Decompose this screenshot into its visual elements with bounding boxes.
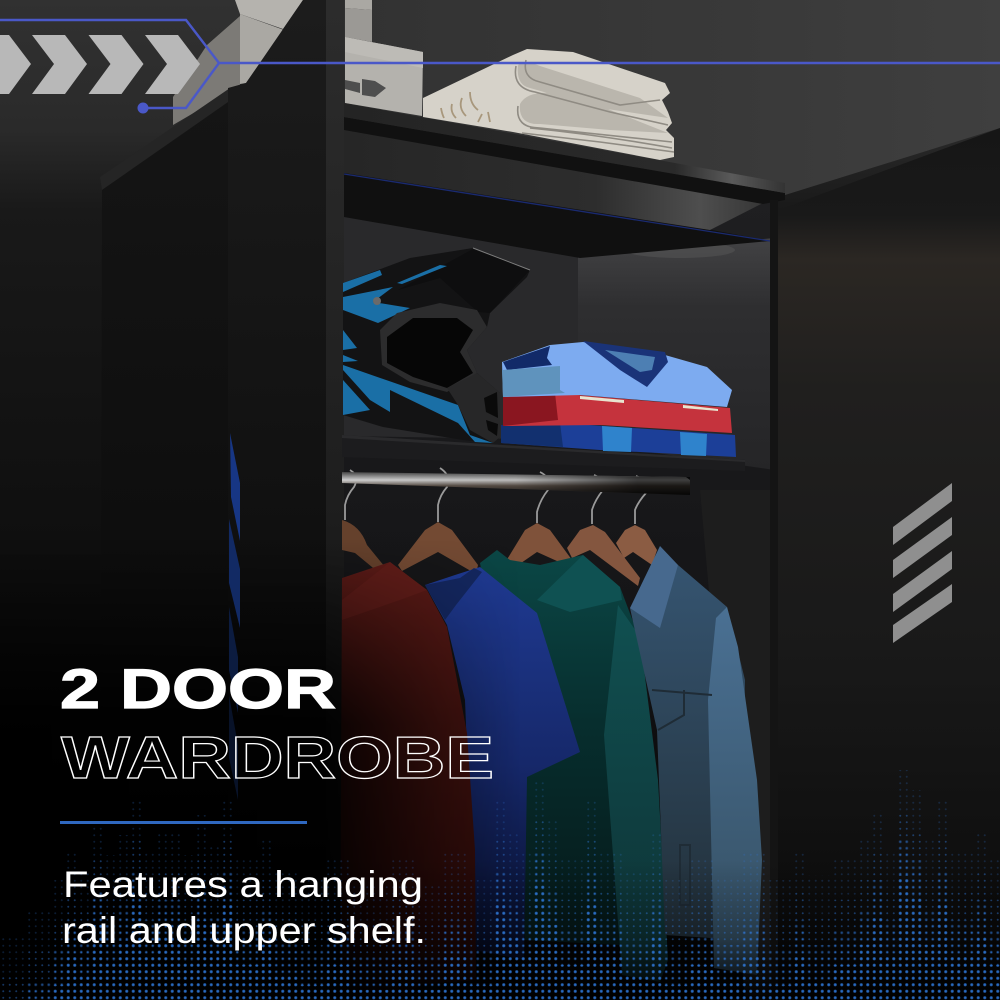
helmet face opening: [387, 318, 473, 388]
title line: 2 DOOR: 2 DOOR: [60, 657, 336, 720]
left dark overlay: [0, 562, 502, 978]
storage boxes on top of wardrobe: [173, 0, 423, 125]
icon: door vents: [893, 483, 952, 643]
wardrobe interior: [344, 103, 785, 1000]
upper right wall: [345, 0, 1000, 195]
helmet chin guard: [447, 373, 500, 443]
hanging rail: [342, 472, 690, 495]
helmet: [343, 248, 530, 443]
garments: [340, 546, 762, 1000]
garment: green hoodie: [480, 550, 668, 982]
circuit end dot: [138, 102, 148, 114]
shirt: middle red: [503, 393, 732, 433]
shirt: top light blue: [502, 341, 732, 407]
hanger hooks: [345, 468, 647, 524]
title: [60, 657, 494, 791]
helmet blue accents: [343, 265, 493, 443]
garment: red hoodie: [340, 562, 476, 1000]
blue chevron stripes on door edge: [229, 433, 240, 800]
divider line: [60, 821, 307, 824]
garment: denim jacket: [630, 546, 762, 975]
left door: [100, 88, 230, 1000]
hanger wood bodies: [342, 520, 657, 586]
halftone dot skyline: [0, 760, 1000, 1000]
description text: Features a hanging: [63, 864, 423, 905]
description text: [62, 864, 426, 951]
right door: [778, 128, 1000, 1000]
circuit line decoration: [0, 20, 1000, 114]
lower shelf: [342, 435, 745, 471]
folded towels: [423, 49, 674, 160]
icon: box latch: [345, 79, 386, 97]
shirt: bottom blue: [501, 423, 736, 457]
helmet visor: [398, 249, 530, 313]
bottom dark gradient: [0, 860, 1000, 1000]
chevron arrows: [0, 35, 200, 94]
garment: blue tee: [425, 567, 580, 960]
helmet face rim: [380, 303, 487, 392]
title line: WARDROBE outline: WARDROBE: [61, 725, 494, 791]
description text: rail and upper shelf.: [62, 910, 426, 951]
folded shirts stack: [501, 341, 736, 457]
wardrobe side panel: [228, 0, 344, 1000]
